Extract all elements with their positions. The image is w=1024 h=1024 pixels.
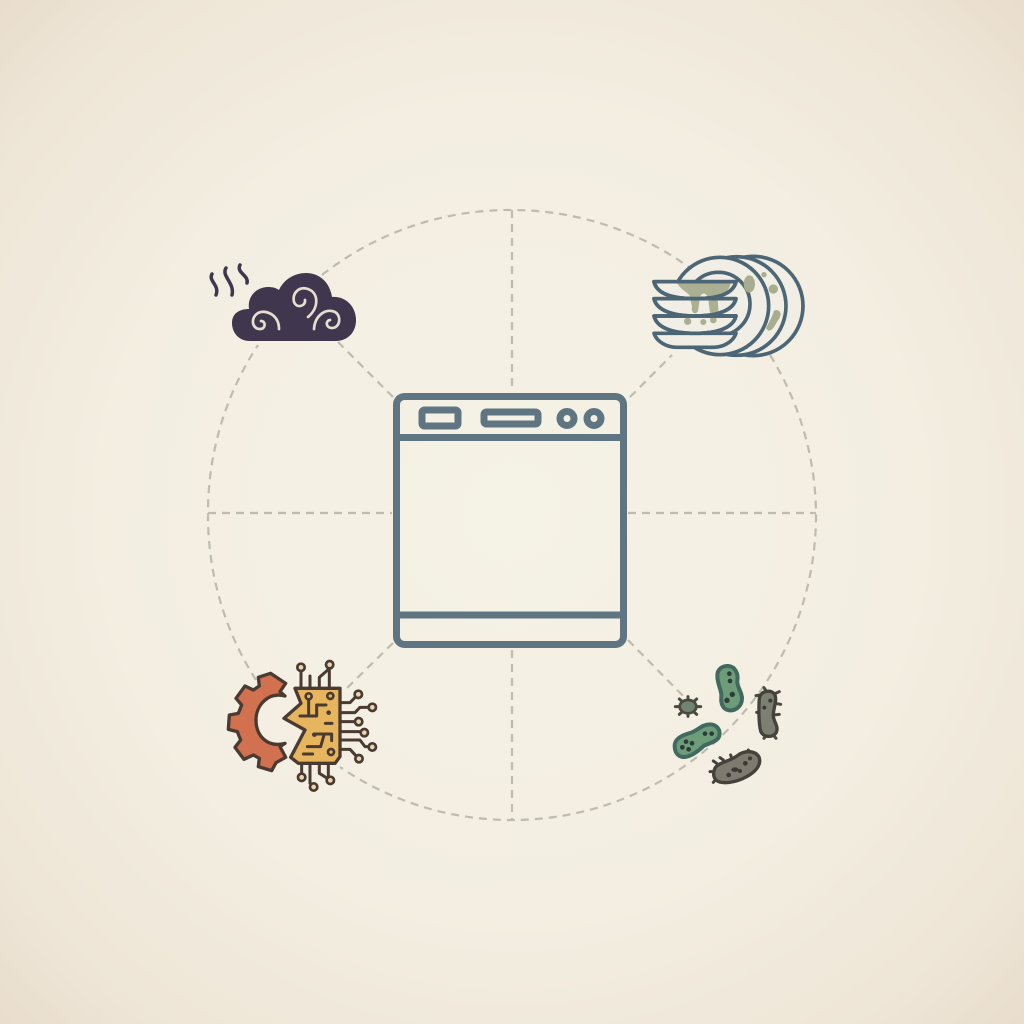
bowl grime drips: [677, 283, 731, 325]
odor wisps: [211, 265, 247, 295]
small spiked germ: [675, 697, 701, 716]
bowls: [654, 282, 736, 347]
grey rod bacterium right: [756, 688, 781, 738]
grey bacterium bottom: [710, 750, 760, 783]
cloud body: [232, 273, 356, 341]
icon: bacteria and germs: [675, 666, 781, 783]
icon: stack of dirty dishes: [654, 256, 803, 356]
back plates: [671, 256, 803, 356]
icon: gear and circuit chip: [228, 661, 376, 791]
bowl rims redrawn: [654, 282, 736, 333]
icon: dishwasher: [396, 396, 624, 644]
plate grime: [744, 272, 781, 331]
chip pin terminals: [297, 661, 376, 791]
icon: cloud of foul odor: [211, 265, 356, 341]
dashed connector ring and spokes: [208, 210, 816, 820]
green bacterium top: [717, 666, 742, 710]
green bacterium left: [675, 724, 720, 757]
gear half: [228, 673, 286, 771]
chip pin traces: [301, 669, 372, 787]
chip solder points: [306, 693, 334, 755]
chip circuit traces: [300, 699, 332, 754]
chip body: [284, 688, 340, 763]
cloud swirls: [253, 288, 339, 329]
